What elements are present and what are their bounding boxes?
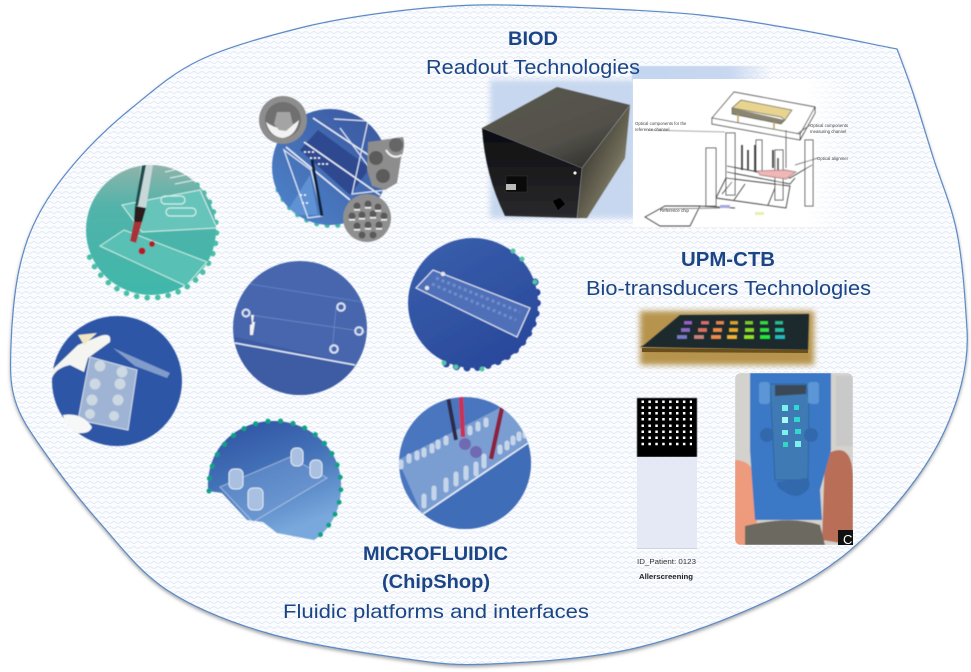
heading: UPM-CTB [586, 249, 871, 300]
diagram callout labels: Reference chip [660, 208, 690, 213]
diagram callout labels: measuring channel [810, 129, 846, 134]
heading: MICROFLUIDIC: MICROFLUIDIC [363, 544, 508, 565]
blue fade band above diagram [632, 66, 772, 80]
diagram details [645, 92, 818, 226]
heading: UPM-CTB: UPM-CTB [681, 249, 775, 271]
photo: biochip colour array [640, 311, 814, 365]
photo: printed dot array slide: ID_Patient: 0123 [637, 559, 696, 566]
photo: blue 3D-printed cartridge with fingers [735, 373, 853, 547]
inset: microstructure cone [259, 96, 307, 144]
diagram callout labels: reference channel [635, 127, 669, 132]
photo: teal syringe chip circle [86, 165, 217, 298]
diagram callout labels: Optical components for the [810, 123, 862, 128]
diagram: optical reader exploded view [632, 66, 848, 227]
diagram callout labels [635, 121, 862, 213]
photo: top circle with microstructure insets [272, 109, 388, 226]
photo: gloved hand with well plate [52, 316, 182, 446]
photo: printed dot array slide [637, 398, 697, 581]
diagram callout labels: Optical alignment [817, 156, 851, 161]
inset: microstructure wells [367, 137, 404, 190]
heading: BIOD: Readout Technologies [426, 56, 640, 79]
heading: MICROFLUIDIC: Fluidic platforms and interfaces [283, 601, 589, 623]
photo: chip with reservoirs, right circle [408, 238, 538, 372]
photo: chip with four reservoirs, cut circle [208, 421, 341, 540]
heading: MICROFLUIDIC [283, 544, 589, 623]
diagram callout labels: Optical components for the [635, 121, 687, 126]
photo: readout instrument box [482, 80, 636, 218]
heading: BIOD [426, 29, 640, 79]
heading: MICROFLUIDIC: (ChipShop) [382, 572, 490, 593]
photo: printed dot array slide: Allerscreening [639, 574, 693, 581]
photo: blue 3D-printed cartridge with fingers: C [843, 532, 852, 547]
heading: UPM-CTB: Bio-transducers Technologies [586, 277, 871, 300]
photo: chip with channels, middle circle [232, 261, 367, 395]
photo: pin array chip with red tubes [398, 395, 540, 535]
inset: microstructure array [343, 194, 391, 242]
heading: BIOD: BIOD [508, 29, 558, 50]
